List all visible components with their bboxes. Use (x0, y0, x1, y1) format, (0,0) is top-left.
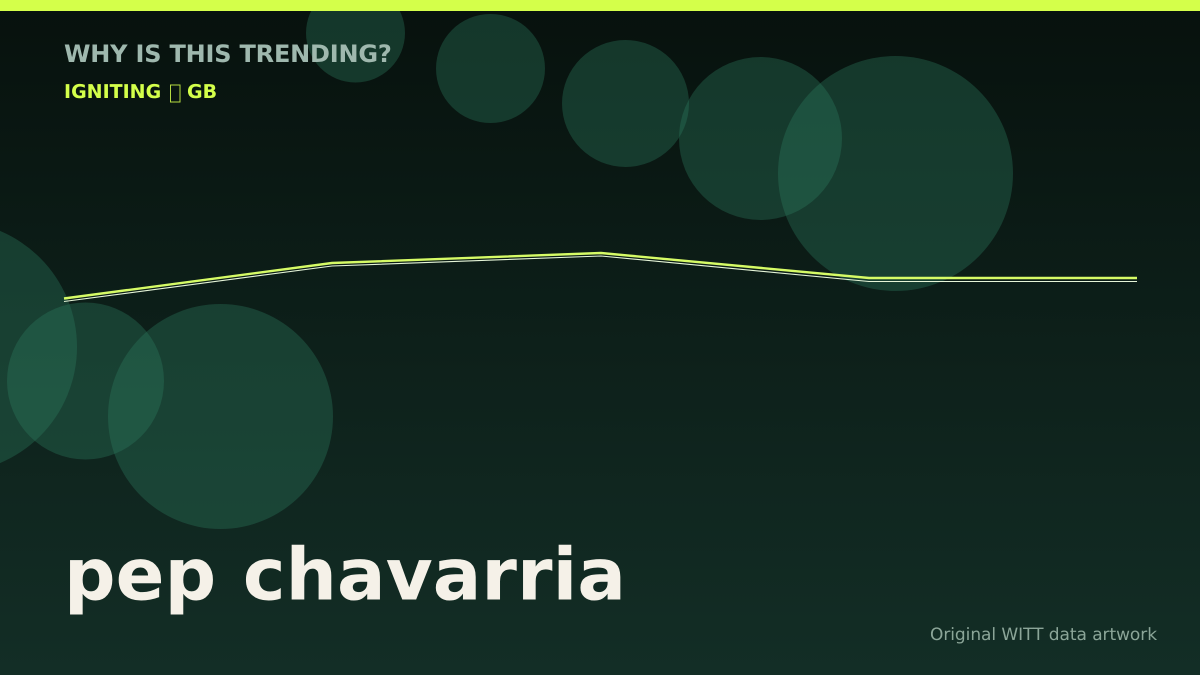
icon: missing glyph box (170, 85, 180, 102)
trend line (64, 253, 1137, 302)
status label: GB (187, 81, 217, 103)
bubble cluster: upper (306, 0, 1013, 291)
eyebrow heading: WHY IS THIS TRENDING? (64, 40, 392, 68)
bubble cluster: lower left (0, 221, 333, 529)
main title: pep chavarria (64, 532, 626, 616)
status label: IGNITING (64, 81, 161, 103)
footer credit: Original WITT data artwork (930, 625, 1157, 645)
top accent bar (0, 0, 1200, 11)
